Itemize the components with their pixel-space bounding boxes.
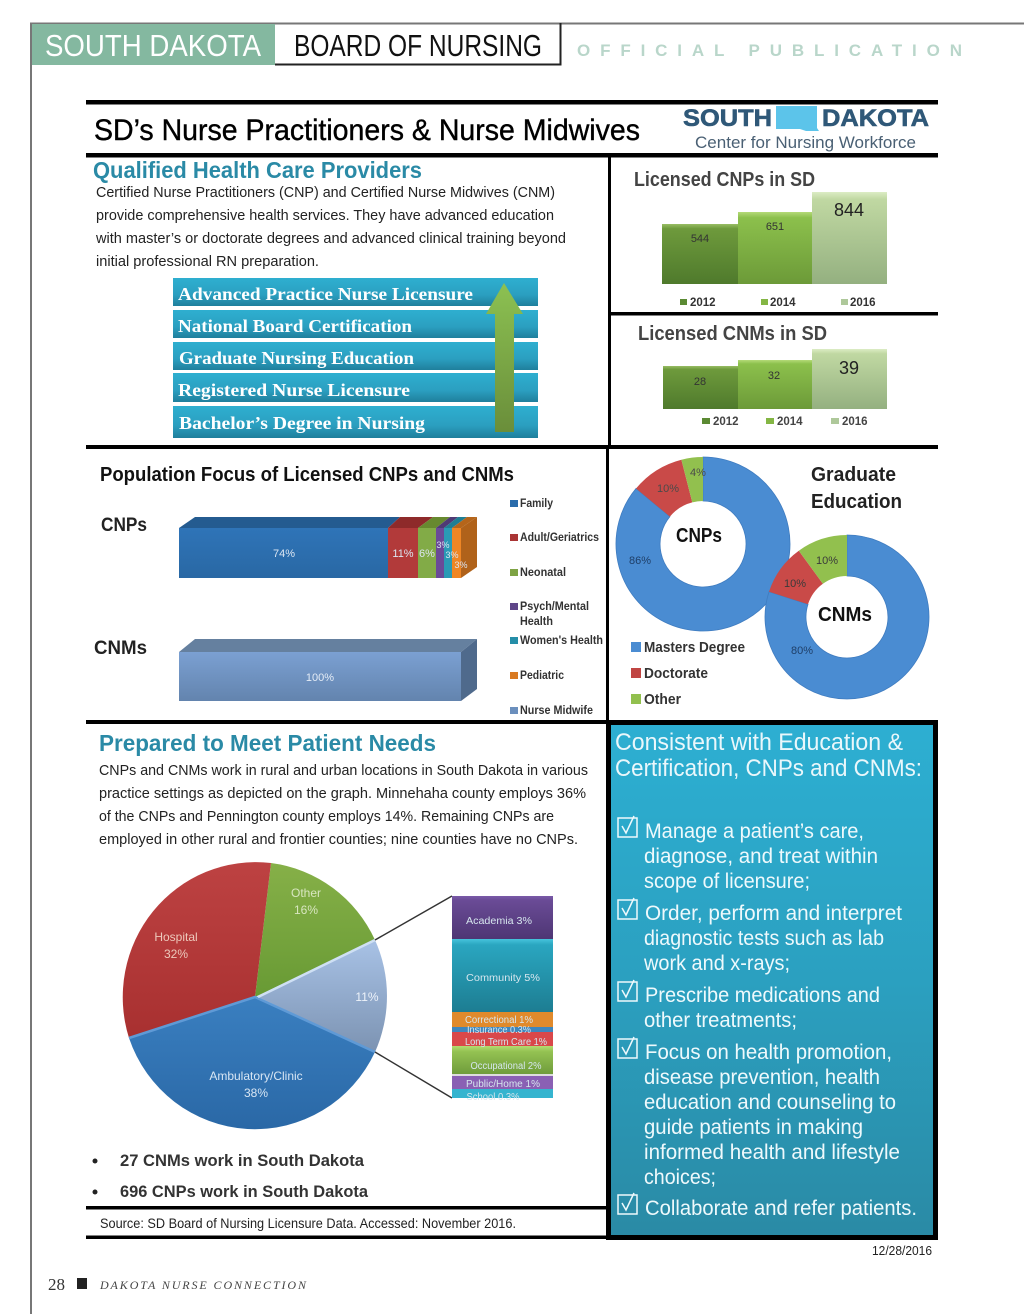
legend: population focus: Neonatal — [520, 567, 566, 579]
text block: provider description: with master’s or doctorate degrees and advanced clinical training beyond — [95, 230, 566, 247]
text block: workforce counts — [92, 1151, 369, 1201]
chart: CNM population focus bar — [94, 638, 477, 701]
checklist: scope of practice: Collaborate and refer patients. — [645, 1197, 917, 1220]
chart: CNP population focus bar: 74% — [273, 548, 295, 560]
panel: graduate education — [616, 457, 929, 708]
logo: South Dakota Center for Nursing Workforce: DAKOTA — [822, 105, 929, 132]
chart: CNP donut: 86% — [629, 555, 651, 567]
chart: licensed CNMs: 28 — [694, 376, 706, 388]
heading: graduate education: Graduate — [811, 464, 896, 486]
legend: population focus: Family — [520, 498, 554, 510]
legend: population focus: Pediatric — [520, 670, 565, 682]
checklist: scope of practice: informed health and lifestyle — [644, 1141, 900, 1164]
panel: qualified health care providers — [93, 157, 566, 438]
diagram: education ladder: Advanced Practice Nurse Licensure — [178, 284, 473, 304]
diagram: education ladder: Graduate Nursing Education — [179, 348, 414, 368]
heading: licensed CNPs: Licensed CNPs in SD — [634, 169, 815, 191]
chart: CNP donut: CNPs — [676, 525, 722, 547]
legend: population focus: Health — [520, 616, 553, 628]
icon: checkbox 3 — [618, 980, 637, 1001]
chart: CNP donut: 10% — [657, 483, 679, 495]
heading: consistent with education — [615, 729, 922, 782]
checklist: scope of practice: Focus on health promotion, — [645, 1041, 892, 1064]
legend: CNP years — [680, 297, 876, 309]
chart: practice settings pie — [123, 862, 387, 1129]
publication name: DAKOTA NURSE CONNECTION — [99, 1278, 307, 1292]
text block: practice settings: of the CNPs and Pennington county employs 14%. Remaining CNPs are — [99, 809, 554, 825]
legend: population focus — [510, 498, 603, 717]
chart: other settings breakdown column: Correctional 1% — [465, 1015, 533, 1026]
chart: CNP population focus bar: CNPs — [101, 515, 147, 536]
checklist: scope of practice: Prescribe medications and — [645, 984, 880, 1007]
checklist: scope of practice: diagnostic tests such as lab — [644, 927, 884, 950]
text block: provider description: initial professional RN preparation. — [96, 253, 319, 270]
heading: qualified providers: Qualified Health Care Providers — [93, 157, 422, 183]
chart: other settings breakdown column: School 0.3% — [466, 1092, 520, 1103]
legend: CNM years: 2016 — [842, 416, 868, 428]
chart: licensed CNMs: 39 — [839, 358, 859, 378]
chart: CNM donut: 10% — [816, 555, 838, 567]
icon: checkbox 1 — [618, 816, 637, 837]
text block: provider description — [95, 184, 566, 270]
chart: other settings breakdown column: Insurance 0.3% — [467, 1025, 531, 1036]
chart: other settings breakdown column — [452, 896, 553, 1103]
chart: CNP donut: 4% — [690, 467, 706, 479]
diagram: education ladder — [173, 278, 538, 438]
arrow: progression upward — [486, 283, 523, 432]
logo: South Dakota Center for Nursing Workforce: Center for Nursing Workforce — [695, 133, 916, 152]
chart: CNP population focus bar: 6% — [419, 548, 435, 560]
chart: practice settings pie: Other — [291, 886, 321, 900]
text block: workforce counts: 696 CNPs work in South Dakota — [120, 1182, 369, 1201]
chart: licensed CNPs: 844 — [834, 200, 864, 220]
page number: 28 — [48, 1275, 65, 1294]
chart: practice settings pie: Hospital — [154, 930, 198, 944]
legend: population focus: Nurse Midwife — [520, 705, 593, 717]
legend: population focus: Adult/Geriatrics — [520, 532, 599, 544]
heading: consistent with education: Certification, CNPs and CNMs: — [615, 755, 922, 782]
chart: CNM donut — [765, 535, 929, 699]
chart: licensed CNMs: 32 — [768, 370, 780, 382]
chart: other settings breakdown column: Community 5% — [466, 973, 540, 984]
legend: CNM years: 2014 — [777, 416, 803, 428]
chart: other settings breakdown column: Occupational 2% — [470, 1061, 542, 1072]
checklist: scope of practice: choices; — [644, 1166, 716, 1189]
chart: licensed CNPs: 651 — [766, 221, 784, 233]
chart: CNP population focus bar: 11% — [392, 548, 414, 560]
masthead: official publication: OFFICIAL PUBLICATION — [577, 41, 962, 60]
checklist: scope of practice: disease prevention, health — [644, 1066, 880, 1089]
chart: CNM donut: CNMs — [818, 604, 872, 626]
legend: population focus: Women's Health — [520, 635, 603, 647]
checklist: scope of practice: Order, perform and interpret — [645, 902, 902, 925]
source note: Source: SD Board of Nursing Licensure Data. Accessed: November 2016. — [100, 1215, 516, 1231]
legend: graduate education: Other — [644, 691, 681, 708]
heading: prepared to meet patient needs: Prepared to Meet Patient Needs — [99, 730, 436, 756]
chart: practice settings pie: 16% — [294, 903, 318, 917]
connector lines: pie to breakdown — [375, 896, 452, 1098]
masthead: Board of Nursing tab: BOARD OF NURSING — [294, 28, 542, 63]
diagram: education ladder: Bachelor’s Degree in Nursing — [179, 413, 425, 433]
diagram: education ladder: National Board Certification — [178, 316, 412, 336]
chart: CNM population focus bar: 100% — [306, 672, 334, 684]
checklist: scope of practice: education and counseling to — [644, 1091, 896, 1114]
legend: graduate education: Doctorate — [644, 665, 708, 682]
chart: CNP population focus bar: 3% — [454, 560, 468, 570]
checklist: scope of practice — [618, 816, 917, 1220]
legend: CNP years: 2012 — [690, 297, 716, 309]
text block: practice settings — [99, 763, 588, 848]
chart: licensed CNPs: 544 — [691, 233, 709, 245]
diagram: education ladder: Registered Nurse Licensure — [178, 380, 410, 400]
chart: licensed CNMs — [638, 323, 887, 428]
chart: practice settings pie: Ambulatory/Clinic — [209, 1069, 303, 1083]
text block: practice settings: employed in other rural and frontier counties; nine counties have no CNPs. — [99, 832, 578, 848]
icon: checkbox 2 — [618, 898, 637, 919]
chart: CNM donut: 80% — [791, 645, 813, 657]
checklist: scope of practice: guide patients in making — [644, 1116, 863, 1139]
checklist: scope of practice: Manage a patient’s care, — [645, 820, 864, 843]
heading: graduate education: Education — [811, 491, 902, 513]
chart: CNM population focus bar: CNMs — [94, 638, 147, 659]
icon: checkbox 4 — [618, 1037, 637, 1058]
checklist: scope of practice: scope of licensure; — [644, 870, 810, 893]
text block: practice settings: CNPs and CNMs work in rural and urban locations in South Dakota in various — [99, 763, 588, 779]
chart: practice settings pie: 11% — [355, 990, 379, 1004]
heading: population focus: Population Focus of Licensed CNPs and CNMs — [100, 464, 514, 486]
title: SD’s Nurse Practitioners & Nurse Midwives — [94, 114, 640, 147]
chart: licensed CNPs — [634, 169, 887, 309]
legend: CNM years — [702, 416, 868, 428]
footer square — [77, 1278, 87, 1289]
masthead — [32, 23, 962, 65]
chart: practice settings pie: 32% — [164, 947, 188, 961]
legend: population focus: Psych/Mental — [520, 601, 589, 613]
text block: provider description: Certified Nurse Practitioners (CNP) and Certified Nurse Midwives (CNM) — [96, 184, 555, 201]
chart: CNM donut: 10% — [784, 578, 806, 590]
date stamp: 12/28/2016 — [872, 1244, 932, 1258]
text block: provider description: provide comprehensive health services. They have advanced education — [96, 207, 554, 224]
panel: prepared to meet patient needs — [92, 730, 588, 1231]
chart: CNP donut — [616, 457, 790, 631]
icon: checkbox 5 — [618, 1193, 637, 1214]
heading: licensed CNMs: Licensed CNMs in SD — [638, 323, 827, 345]
heading: graduate education — [811, 464, 902, 513]
logo: South Dakota Center for Nursing Workforce: SOUTH — [683, 105, 772, 132]
section rules — [86, 100, 938, 1239]
text block: workforce counts: 27 CNMs work in South Dakota — [120, 1151, 365, 1170]
checklist: scope of practice: work and x-rays; — [643, 952, 790, 975]
panel: consistent with education and certification — [608, 722, 936, 1238]
chart: other settings breakdown column: Academia 3% — [466, 916, 532, 927]
heading: consistent with education: Consistent with Education & — [615, 729, 903, 756]
legend: graduate education — [631, 639, 745, 708]
chart: CNP population focus bar: 3% — [436, 540, 450, 550]
chart: CNP population focus bar — [101, 515, 477, 578]
legend: graduate education: Masters Degree — [644, 639, 745, 656]
chart: practice settings pie: 38% — [244, 1086, 268, 1100]
masthead: South Dakota tab: SOUTH DAKOTA — [45, 28, 261, 63]
panel: population focus — [94, 464, 603, 717]
footer — [48, 1275, 307, 1294]
chart: other settings breakdown column: Long Term Care 1% — [465, 1037, 547, 1048]
checklist: scope of practice: diagnose, and treat within — [644, 845, 878, 868]
chart: other settings breakdown column: Public/Home 1% — [466, 1079, 540, 1090]
text block: practice settings: practice settings as depicted on the graph. Minnehaha county employs 36% — [99, 786, 586, 802]
legend: CNP years: 2016 — [850, 297, 876, 309]
chart: CNP population focus bar: 3% — [445, 550, 459, 560]
checklist: scope of practice: other treatments; — [644, 1009, 797, 1032]
legend: CNP years: 2014 — [770, 297, 796, 309]
legend: CNM years: 2012 — [713, 416, 739, 428]
logo: South Dakota Center for Nursing Workforce — [683, 105, 929, 152]
masthead: Board of Nursing tab — [275, 23, 560, 64]
